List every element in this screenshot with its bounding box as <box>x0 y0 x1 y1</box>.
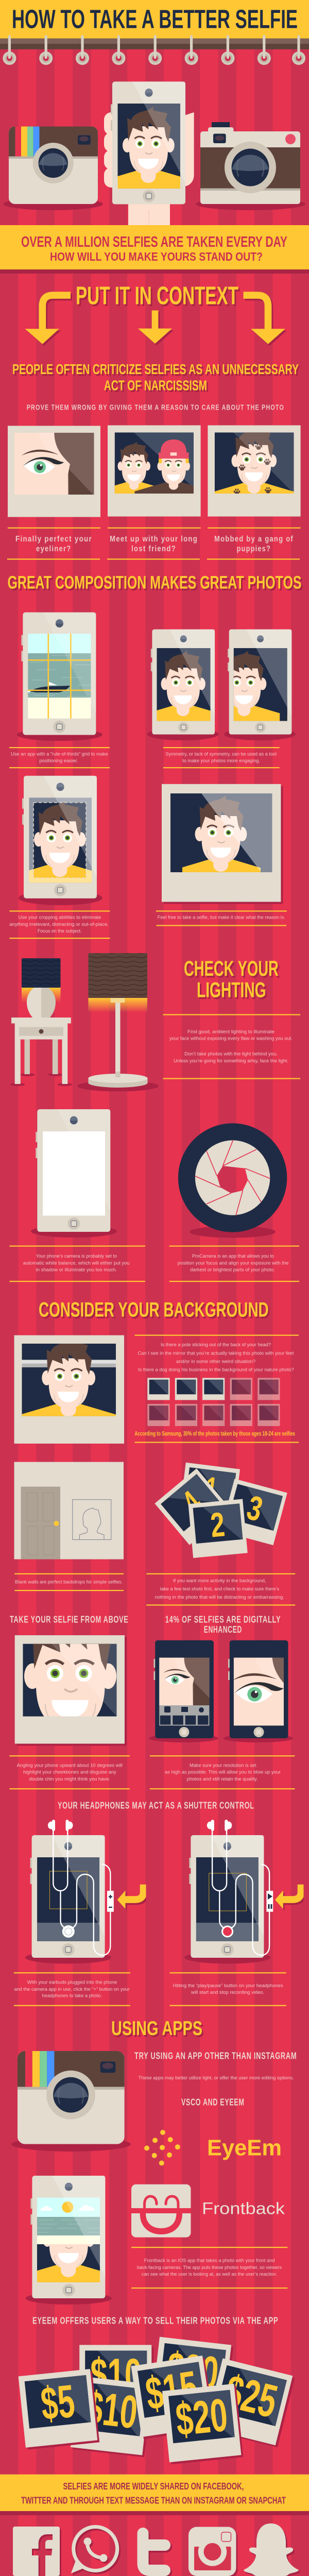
phones: enhanced eye <box>149 1640 293 1742</box>
subheading: take your selfie from above: TAKE YOUR SELFIE FROM ABOVE <box>10 1614 129 1624</box>
icon: whatsapp <box>71 2527 117 2573</box>
caption: plus button <box>14 1972 130 2006</box>
captions under polaroids: Mobbed by a gang of <box>214 535 294 544</box>
polaroid: two friends <box>108 426 201 516</box>
phone: frontback split photo <box>26 2176 112 2304</box>
subheading: digitally enhanced: ENHANCED <box>204 1624 242 1635</box>
text: lighting tips: Don’t take photos with the light behind you. <box>184 1052 278 1057</box>
header banner <box>0 0 309 38</box>
aperture icon <box>186 1132 279 1238</box>
pile of priced polaroids: $5 <box>39 2376 77 2430</box>
pile of priced polaroids: $20 <box>174 2389 230 2446</box>
text: frontback description: back-facing cameras. The app puts these photos together, so viewers <box>137 2265 282 2270</box>
caption: symmetry: to make your photos more engaging. <box>182 758 260 764</box>
caption: blank walls: Blank walls are perfect backdrops for simple selfies. <box>15 1579 123 1584</box>
phone: rule of thirds <box>17 612 102 741</box>
sub heading: narcissism <box>12 361 299 393</box>
text: lighting tips: your face without exposing every flaw or washing you out. <box>169 1036 293 1041</box>
text: background questions and samsung stat: Is there a pole sticking out of the back of your head? <box>161 1342 271 1347</box>
polaroid: blank wall with door <box>14 1462 124 1559</box>
caption: cropping: Use your cropping abilities to eliminate <box>19 915 101 920</box>
text: background questions and samsung stat: and/or in some other weird situation? <box>176 1359 255 1364</box>
caption: resolution <box>150 1755 295 1789</box>
text: try another app: VSCO AND EYEEM <box>181 2097 245 2108</box>
arrow <box>117 1885 143 1909</box>
text: frontback description: can see what the user is looking at, as well as the user’s reaction. <box>142 2272 277 2277</box>
heading: check your lighting: LIGHTING <box>197 978 266 1002</box>
text: try another app: These apps may better utilize light, or offer the user more editing options. <box>139 2075 294 2080</box>
caption: procamera: ProCamera is an app that allows you to <box>192 1253 274 1259</box>
caption: symmetry: Symmetry, or lack of symmetry, can be used as a tool <box>166 751 277 756</box>
polaroid: pole behind head <box>14 1335 124 1444</box>
caption: procamera: darkest or brightest parts of your photo. <box>190 1267 275 1273</box>
text: lighting tips <box>163 1014 300 1079</box>
curtain rod with rings <box>0 35 309 65</box>
stack of numbered polaroids: 3 <box>243 1488 266 1529</box>
arrow <box>275 1885 301 1909</box>
icon: instagram <box>188 2527 236 2576</box>
icon: twitter <box>143 2533 165 2570</box>
caption: procamera: position your focus and align your exposure with the <box>178 1260 288 1265</box>
illustration: floor lamp <box>77 953 159 1091</box>
caption: test shots: nothing in the photo that will be distracting or embarrassing. <box>155 1595 284 1600</box>
illustration: table with lamp <box>10 958 72 1086</box>
caption: test shots: If you want more activity in the background, <box>173 1578 266 1583</box>
caption: cropping: anything irrelevant, distracting or out-of-place. <box>9 922 109 927</box>
logo: eyeem <box>144 2130 282 2166</box>
polaroid: eyeliner <box>8 426 100 517</box>
pile of priced polaroids <box>19 2337 293 2462</box>
phone: eye with filters <box>153 1640 214 1738</box>
pile of priced polaroids: $30 <box>164 2343 221 2400</box>
icon: snapchat <box>244 2523 299 2576</box>
logo: frontback <box>131 2184 285 2238</box>
caption: plus button: With your earbuds plugged into the phone <box>27 1979 117 1985</box>
caption: cropping: Focus on the subject. <box>38 928 82 934</box>
captions under polaroids: Finally perfect your <box>15 535 92 544</box>
pile of priced polaroids: $10 <box>90 2349 142 2401</box>
three yellow arrows <box>25 295 285 344</box>
captions under polaroids: lost friend? <box>131 545 176 553</box>
pile of priced polaroids: $25 <box>220 2365 282 2428</box>
caption: symmetry <box>163 747 280 768</box>
captions under polaroids <box>7 528 301 560</box>
heading: put it in context: PUT IT IN CONTEXT <box>76 282 238 310</box>
phone: white balance <box>31 1109 117 1238</box>
caption: resolution: Make sure your resolution is set <box>190 1762 256 1768</box>
caption: procamera <box>169 1246 299 1282</box>
illustration: instagram style camera <box>3 127 103 210</box>
text: background questions and samsung stat: Is there a dog doing his business in the background of your nature photo? <box>138 1367 294 1372</box>
caption: upward angle: highlight your cheekbones and disguise any <box>23 1770 116 1775</box>
caption: plus button: and the camera app in use, click the “+” button on your <box>14 1987 130 1992</box>
phone: cropping <box>0 776 122 905</box>
caption: white balance: in shadow or illuminate you too much. <box>36 1267 117 1273</box>
big instagram camera <box>11 2051 131 2151</box>
caption: resolution: as high as possible. This will allow you to blow up your <box>165 1770 281 1775</box>
pile of priced polaroids: $15 <box>143 2362 201 2420</box>
caption: upward angle: double chin you might think you have. <box>29 1776 110 1782</box>
pile of priced polaroids: $10 <box>83 2382 140 2439</box>
text: frontback description <box>131 2247 287 2289</box>
banner: million selfies <box>0 225 309 274</box>
text: background questions and samsung stat: Can I see in the mirror that you’re actually taking this photo with your feet <box>138 1350 294 1355</box>
caption: play pause: Hitting the “play/pause” button on your headphones <box>173 1983 283 1988</box>
stack of numbered polaroids: 4 <box>175 1484 210 1522</box>
banner: selfies shared: SELFIES ARE MORE WIDELY SHARED ON FACEBOOK, <box>63 2481 244 2492</box>
heading: using apps: USING APPS <box>111 2018 202 2040</box>
caption: upward angle: Angling your phone upward about 10 degrees will <box>16 1762 123 1768</box>
captions under polaroids: puppies? <box>237 545 271 553</box>
phone with earbuds: photo <box>25 1820 143 1964</box>
phones: symmetry <box>147 630 296 740</box>
polaroid: close up from above <box>14 1635 127 1745</box>
caption: upward angle <box>9 1755 130 1789</box>
captions under polaroids: Meet up with your long <box>110 535 198 544</box>
caption: rule of thirds: Use an app with a “rule-of-thirds” grid to make <box>11 751 108 756</box>
caption: rule of thirds <box>9 747 110 768</box>
caption: reason: Feel free to take a selfie, but make it clear what the reason is. <box>158 915 285 920</box>
caption: play pause <box>170 1972 286 2006</box>
captions under polaroids: eyeliner? <box>36 545 71 553</box>
caption: rule of thirds: positioning easier. <box>39 758 78 764</box>
caption: white balance: Your phone’s camera is probably set to <box>36 1253 117 1259</box>
caption: resolution: photos and still retain the quality. <box>187 1776 258 1782</box>
caption: white balance: automatic white balance, which will either put you <box>23 1260 130 1265</box>
framed selfie <box>159 784 283 902</box>
subheading: digitally enhanced <box>165 1614 281 1635</box>
icon: facebook <box>13 2527 60 2576</box>
caption: cropping <box>9 910 110 939</box>
logo: eyeem: EyeEm <box>207 2135 282 2161</box>
caption: plus button: headphones to take a photo. <box>42 1993 102 1998</box>
stack of numbered polaroids: 2 <box>209 1505 227 1545</box>
banner: selfies shared <box>0 2475 309 2515</box>
logo: frontback: Frontback <box>202 2199 285 2217</box>
banner: million selfies: HOW WILL YOU MAKE YOURS STAND OUT? <box>50 250 263 263</box>
text: background questions and samsung stat <box>134 1335 299 1443</box>
illustration: retro camera <box>196 122 305 210</box>
text: frontback description: Frontback is an IOS app that takes a photo with your front and <box>144 2258 275 2263</box>
polaroid: puppies <box>208 426 301 516</box>
text: lighting tips: Unless you’re going for something artsy, face the light. <box>174 1058 288 1063</box>
phone with earbuds: video <box>184 1820 301 1964</box>
caption: test shots <box>146 1573 295 1605</box>
social icons row <box>13 2523 299 2576</box>
stack of numbered polaroids: 1 <box>203 1470 219 1509</box>
text: lighting tips: Find good, ambient lighting to illuminate <box>187 1029 274 1034</box>
heading: check your lighting <box>184 956 279 1002</box>
sub heading: narcissism: ACT OF NARCISSISM <box>104 377 207 393</box>
stack of numbered polaroids <box>154 1463 287 1558</box>
illustration: hand holding phone with selfie <box>87 81 210 225</box>
caption: test shots: take a few test shots first, and check to make sure there’s <box>160 1586 279 1591</box>
text: try another app <box>134 2050 297 2108</box>
mini polaroid grid <box>147 1378 280 1426</box>
caption: play pause: will start and stop recording video. <box>191 1990 264 1995</box>
phone: enlarged eye <box>228 1640 288 1738</box>
caption: white balance <box>9 1246 145 1282</box>
